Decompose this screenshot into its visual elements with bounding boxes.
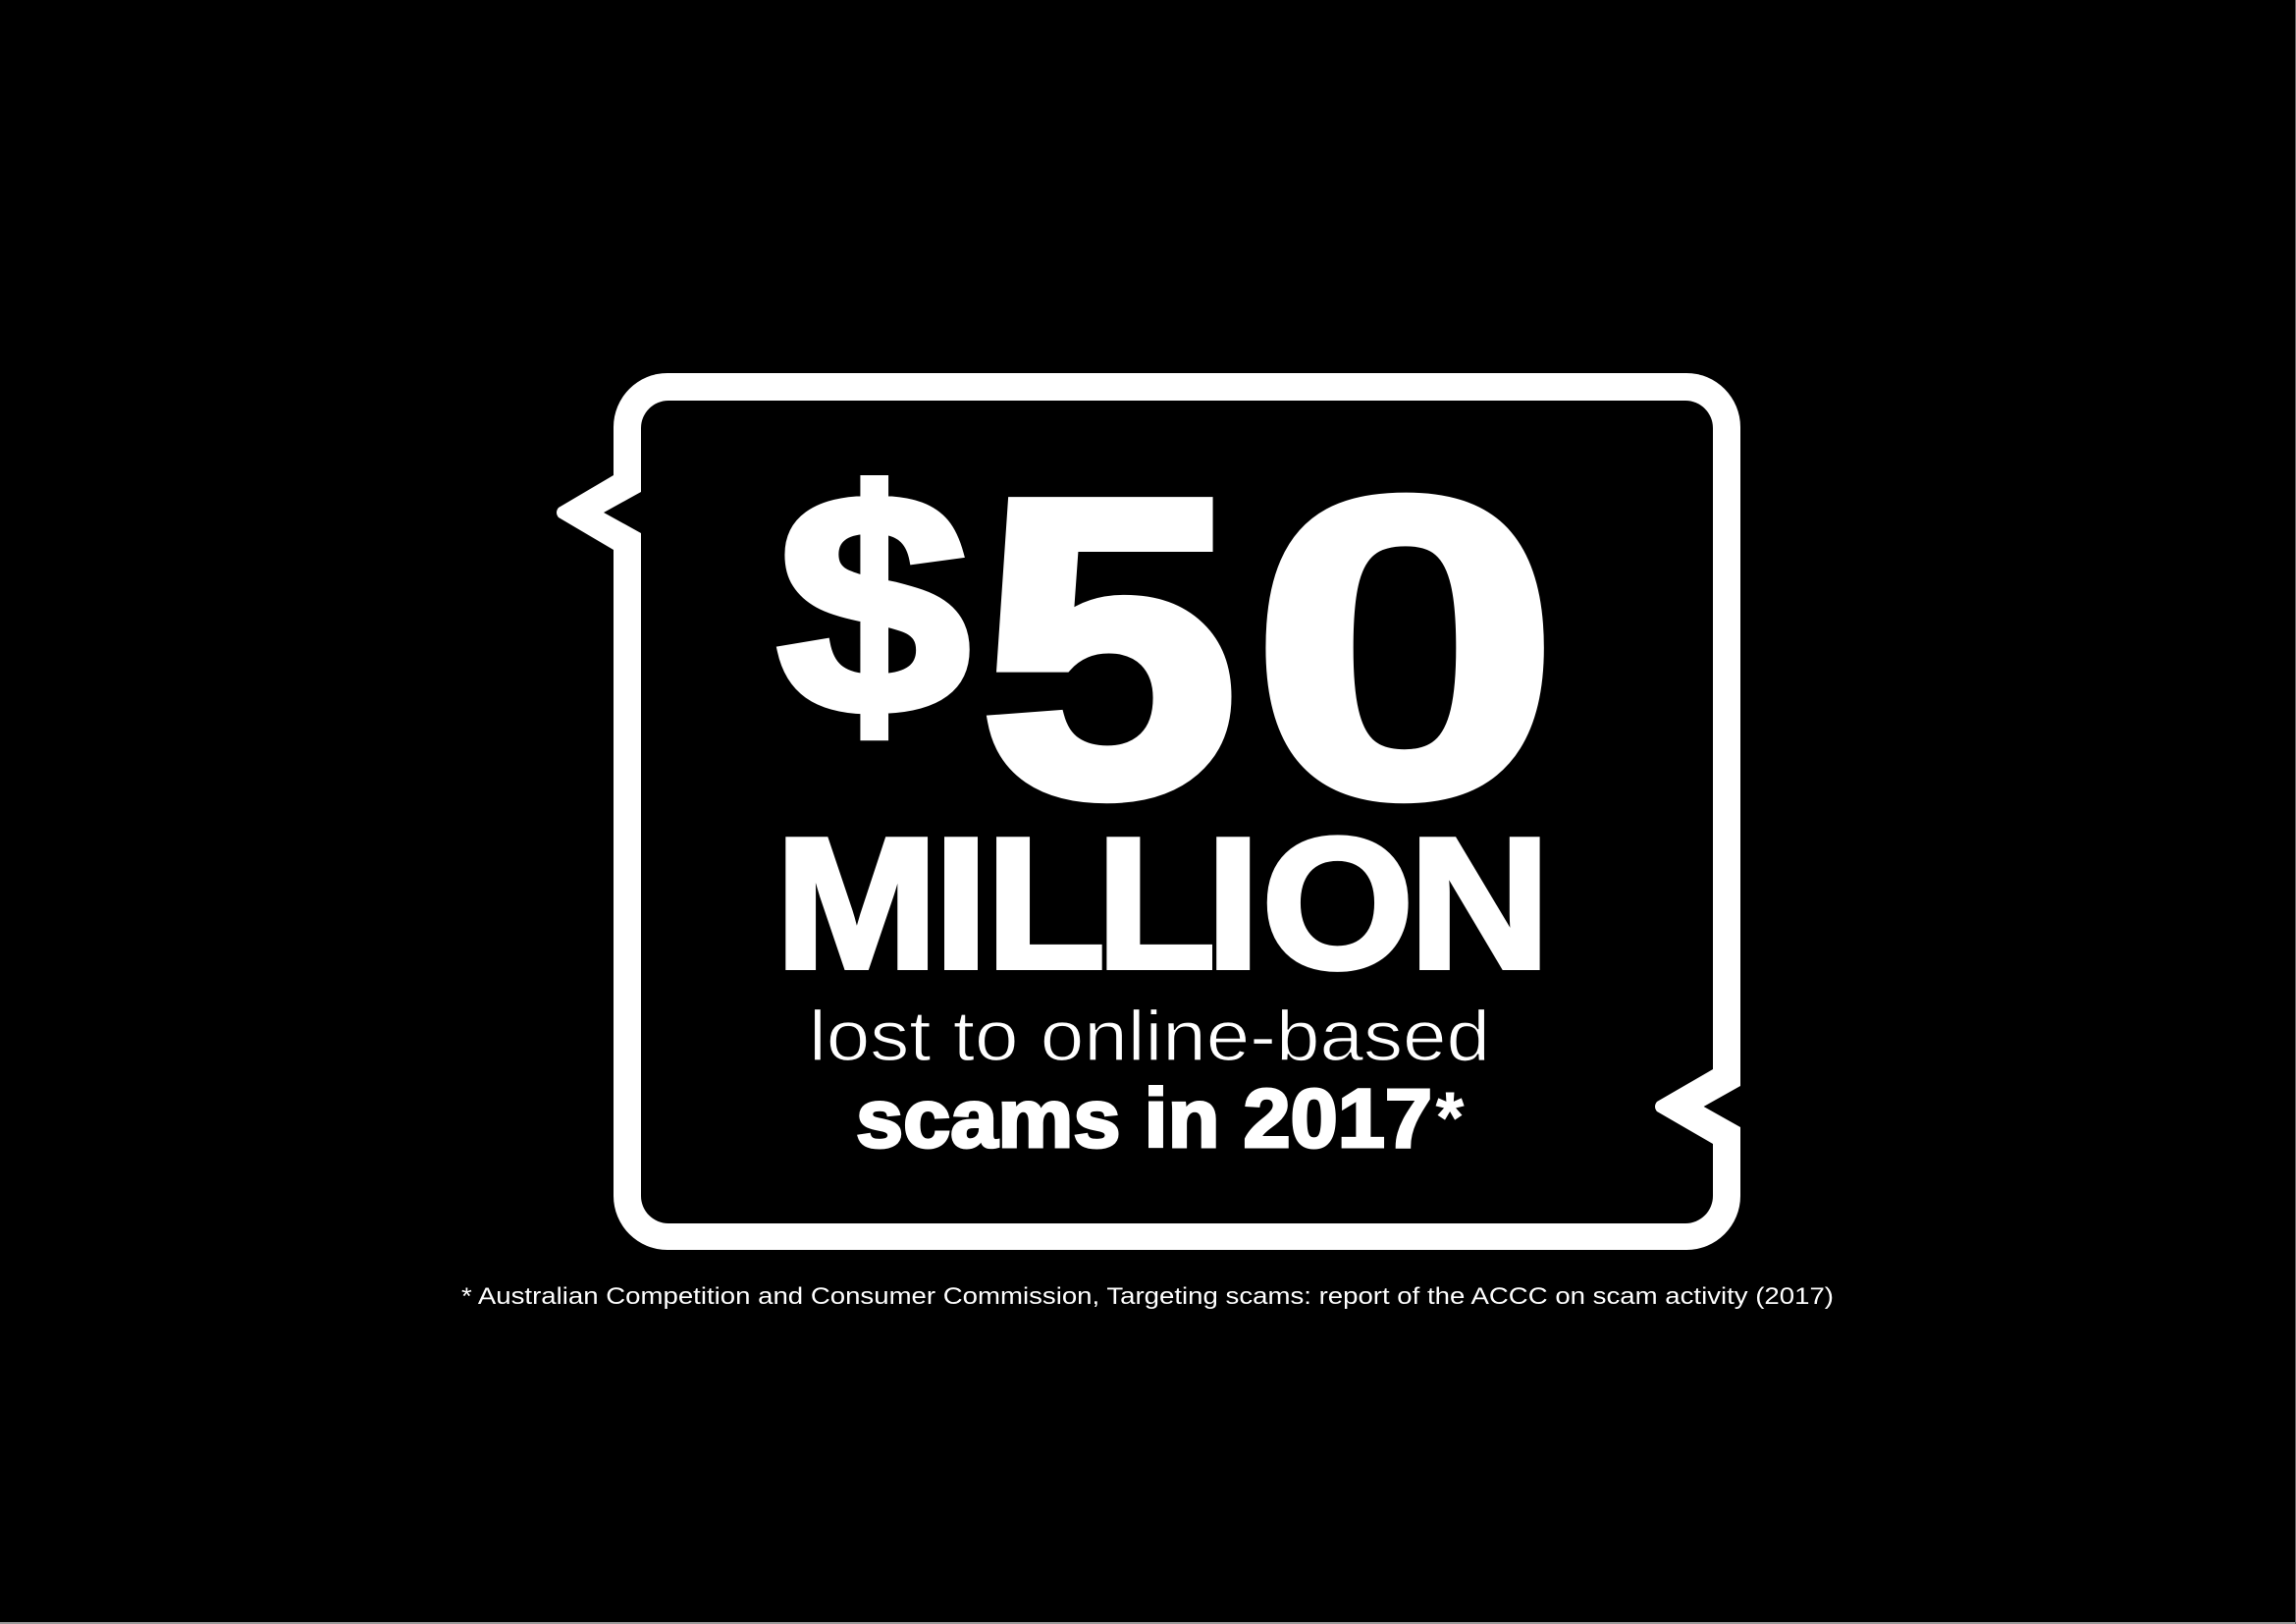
headline amount: $50: 5 (980, 411, 1238, 883)
headline amount: $50: $ (777, 429, 970, 780)
source footnote: * Australian Competition and Consumer Commission, Targeting scams: report of the ACCC on scam activity (2017) (461, 1283, 1834, 1310)
headline unit: MILLION: MILLION (775, 800, 1550, 1007)
subheading line 1: lost to online-based (809, 998, 1490, 1076)
headline amount: $50: 0 (1249, 408, 1562, 886)
speech bubble frame (557, 373, 1740, 1250)
subheading line 2: scams in 2017 (856, 1072, 1432, 1164)
headline amount: $50 (777, 408, 1562, 886)
footnote asterisk: * (1436, 1079, 1464, 1158)
